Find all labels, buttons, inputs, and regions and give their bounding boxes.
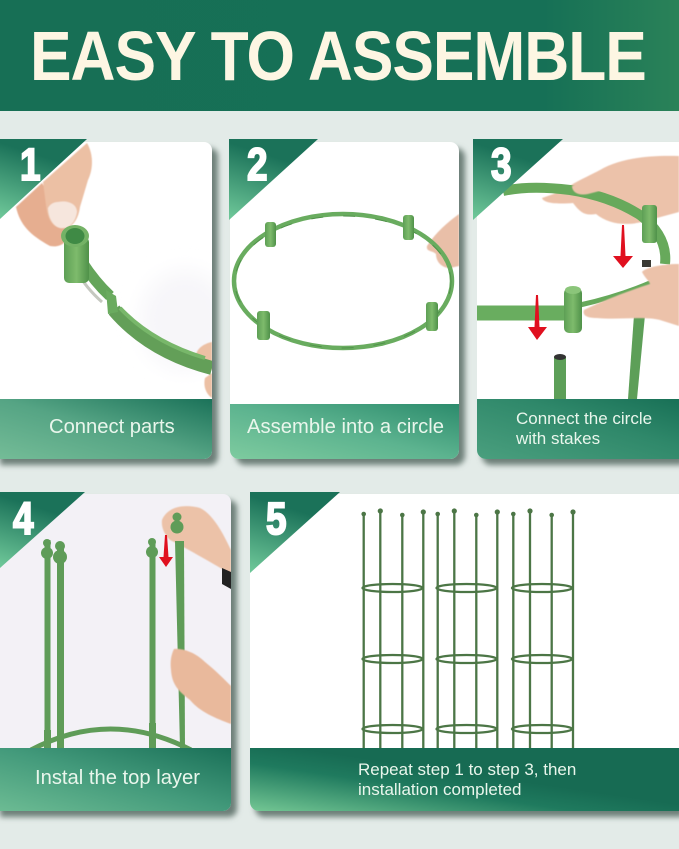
cage 2 xyxy=(435,508,500,748)
icon: stakes xyxy=(554,260,651,399)
icon: hand behind ring xyxy=(427,214,459,268)
caption: Repeat step 1 to step 3, then xyxy=(358,760,576,779)
step badge 2: 2 xyxy=(247,140,268,190)
icon: hand holding part xyxy=(16,143,212,398)
step badge 5: 5 xyxy=(266,494,287,544)
icon: lower hand xyxy=(171,649,231,724)
header banner xyxy=(0,0,679,111)
icon: assembled ring xyxy=(234,214,452,348)
icon: green ring segment xyxy=(61,225,212,368)
cage 1 xyxy=(361,508,426,748)
icon: stakes with finials xyxy=(41,538,158,748)
caption band xyxy=(0,748,231,811)
caption line 2: with stakes xyxy=(515,429,600,448)
panel: step 4 install the top layer xyxy=(0,492,237,817)
caption band xyxy=(477,399,679,459)
panel: step 1 connect parts xyxy=(0,139,230,465)
caption: Connect parts xyxy=(49,416,175,438)
step badge 1 xyxy=(0,139,87,219)
step badge 4: 4 xyxy=(13,494,34,544)
cage 3 xyxy=(511,508,576,748)
step badge 2 xyxy=(229,139,318,220)
panel: step 3 connect the circle with stakes xyxy=(473,139,679,465)
caption band xyxy=(0,399,212,459)
icon: bottom ring xyxy=(31,729,191,750)
title: EASY TO ASSEMBLE xyxy=(30,18,647,96)
step badge 4 xyxy=(0,492,85,568)
icon: hands holding ring xyxy=(477,156,679,333)
icon: upper hand with finial xyxy=(162,506,231,748)
arrow: down xyxy=(528,295,547,340)
caption band xyxy=(250,748,679,811)
caption band xyxy=(230,404,459,459)
caption: Instal the top layer xyxy=(35,767,200,789)
illustration: three finished plant cages xyxy=(361,508,576,748)
step badge 3 xyxy=(473,139,563,220)
step badge 5 xyxy=(250,492,340,573)
panel: step 2 assemble into a circle xyxy=(229,139,465,465)
caption line 2: installation completed xyxy=(358,780,521,799)
caption: Connect the circle xyxy=(516,409,652,428)
step badge 1: 1 xyxy=(20,140,41,190)
arrow: down xyxy=(613,225,633,268)
step badge 3: 3 xyxy=(491,140,512,190)
caption: Assemble into a circle xyxy=(247,416,444,438)
panel: step 5 installation completed xyxy=(250,492,679,817)
arrow: down xyxy=(159,535,173,567)
